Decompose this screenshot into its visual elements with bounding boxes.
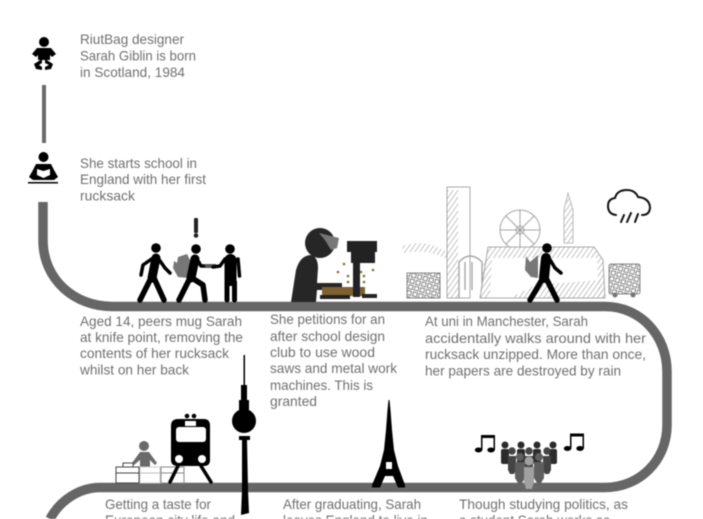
sketch: left box — [407, 273, 440, 298]
text: Europe: Getting a taste for — [105, 496, 211, 512]
sparks — [337, 263, 374, 283]
figure: peer with knife — [213, 244, 240, 300]
text: school: She starts school in — [80, 155, 197, 171]
sketch: gate — [459, 256, 482, 298]
text: mugged — [79, 313, 243, 378]
icon: Berlin TV tower — [232, 355, 256, 515]
text: Manchester: her papers are destroyed by rain — [425, 362, 621, 378]
text: Manchester: rucksack unzipped. More than once, — [425, 346, 646, 362]
text: born — [80, 31, 196, 80]
icon: suitcases — [116, 463, 184, 483]
text: mugged: Aged 14, peers mug Sarah — [80, 313, 242, 329]
text: design club: granted — [270, 393, 317, 409]
text: design club — [270, 311, 398, 409]
icon: rucksack — [173, 254, 191, 278]
text: mugged: at knife point, removing the — [80, 329, 243, 345]
text: design club: machines. This is — [270, 377, 373, 393]
scene: welder at drill press — [291, 228, 377, 302]
icon: wood plank — [322, 287, 365, 296]
choir soloist — [524, 456, 534, 489]
timeline connector: birth to school — [42, 85, 46, 143]
figure: student walking — [530, 243, 561, 300]
sketch: wheel — [500, 210, 540, 250]
choir back row — [501, 442, 557, 464]
text: design club: She petitions for an — [270, 311, 385, 327]
text: Paris: After graduating, Sarah — [283, 496, 421, 512]
sketch: spire — [564, 193, 573, 243]
icon: Eiffel Tower — [372, 400, 405, 488]
figure: Sarah — [179, 244, 206, 300]
icon: child reading — [28, 152, 58, 184]
choir third row — [515, 453, 544, 483]
text: design club: club to use wood — [270, 344, 375, 360]
text: design club: after school design — [270, 328, 385, 344]
text: mugged: contents of her rucksack — [80, 345, 230, 361]
figure: traveller — [132, 441, 157, 470]
text: born: in Scotland, 1984 — [80, 64, 185, 80]
scene: Manchester sketch — [402, 187, 640, 300]
figure: walking peer — [140, 243, 170, 300]
text: school: rucksack — [80, 188, 136, 204]
text: born: Sarah Giblin is born — [80, 48, 196, 64]
text: Manchester: accidentally walks around with her — [425, 330, 646, 346]
icon: exclamation mark — [194, 218, 198, 238]
sketch: bus — [609, 264, 640, 298]
icon: knife — [204, 264, 216, 268]
text: mugged: whilst on her back — [79, 362, 190, 378]
figure: welder — [291, 228, 342, 302]
icon: baby — [32, 37, 56, 70]
text: Manchester: At uni in Manchester, Sarah — [425, 313, 588, 329]
icon: rain cloud — [608, 190, 650, 222]
sketch: building — [480, 247, 605, 298]
text: design club: saws and metal work — [270, 360, 398, 376]
text: politics — [459, 496, 628, 519]
icon: drill press — [320, 241, 377, 299]
icon: choir — [501, 442, 557, 489]
icon: music note left — [475, 435, 495, 452]
scene: travel — [116, 414, 211, 483]
text: politics: Though studying politics, as — [459, 496, 628, 512]
text: Manchester — [425, 313, 646, 378]
icon: welding visor — [319, 233, 339, 250]
icon: rucksack — [525, 255, 538, 278]
scene: mugging — [140, 218, 240, 300]
text: Paris — [283, 496, 428, 519]
icon: train — [170, 414, 211, 482]
choir second row — [508, 447, 551, 474]
sketch: tower — [447, 187, 470, 298]
text: Europe — [105, 496, 235, 519]
icon: music note right — [564, 434, 584, 451]
timeline track — [43, 202, 667, 519]
text: school: England with her first — [80, 171, 206, 187]
text: school — [80, 155, 206, 204]
text: born: RiutBag designer — [80, 31, 184, 47]
sketch: hill — [402, 243, 447, 259]
